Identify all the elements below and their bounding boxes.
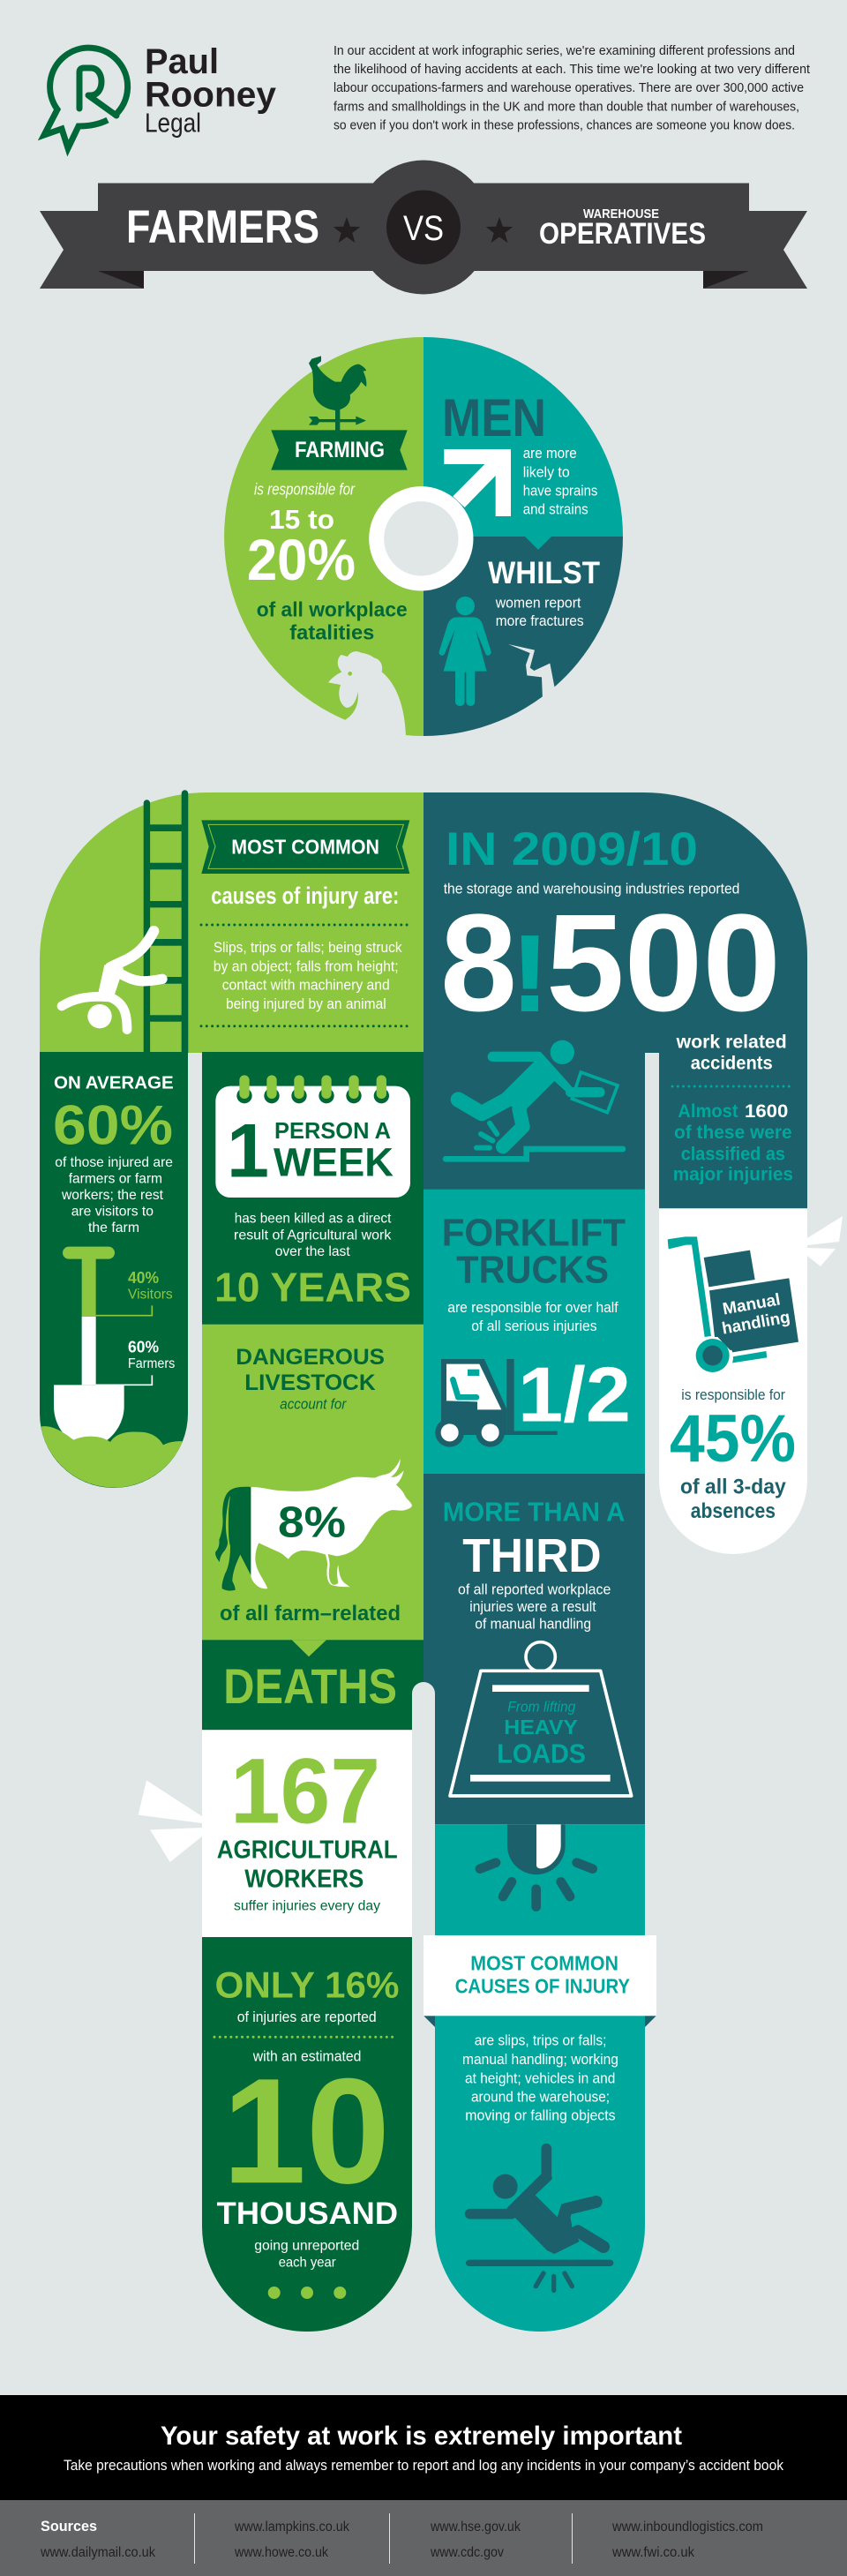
title banner [40, 161, 807, 295]
heading: in 2009/10: IN 2009/10 [446, 823, 698, 875]
text: major injuries: major injuries [673, 1165, 793, 1185]
heading: dangerous livestock: DANGEROUS [236, 1345, 385, 1370]
label: manual handling [721, 1290, 791, 1339]
text: farming fatalities: fatalities [289, 620, 374, 643]
icon: hen cut-out [324, 651, 417, 741]
icon: hand truck [668, 1236, 798, 1372]
text: major injuries: of these were [674, 1123, 792, 1143]
heading: more than a third: MORE THAN A [443, 1496, 625, 1527]
text: those injured: workers; the rest [61, 1188, 164, 1203]
stat: 8,500 [440, 886, 781, 1040]
panel: left arm, on average [40, 1052, 188, 1488]
text: farm related: of all farm–related [220, 1602, 401, 1626]
text: causes list: are slips, trips or falls; [475, 2032, 606, 2049]
label: visitors: Visitors [128, 1288, 173, 1303]
text: responsible: is responsible for [681, 1387, 785, 1403]
text: forklift stat [447, 1299, 618, 1334]
stat: thousand: THOUSAND [217, 2197, 398, 2231]
stat: 167: 167 [230, 1740, 380, 1844]
text: work related accidents: work related [676, 1032, 787, 1052]
text: whilst [488, 556, 600, 629]
text: those injured: the farm [88, 1220, 139, 1235]
stat: 8,500: 8 [440, 886, 517, 1040]
logo wordmark: Rooney [145, 76, 277, 115]
panel background [0, 2395, 847, 2500]
stat: 1 person a week [227, 1108, 394, 1193]
panel background [659, 1208, 807, 1554]
label: manual handling: Manual [721, 1290, 782, 1319]
ribbon body [98, 161, 749, 295]
stat: 1 person a week: 1 [227, 1108, 269, 1193]
text: precautions: Take precautions when working and always remember to report and log any incidents in your company’s accident book [64, 2457, 783, 2474]
text: major injuries: classified as [681, 1144, 785, 1164]
text: heavy loads: HEAVY [504, 1716, 578, 1739]
panel: sources [0, 2500, 847, 2576]
heading: farmers: FARMERS [126, 201, 319, 253]
text: men: are more [523, 445, 577, 462]
heading: warehouse operatives: WAREHOUSE [583, 207, 659, 222]
panel background [202, 1937, 412, 2332]
panel: dangerous livestock [202, 1325, 424, 1641]
VS badge [386, 191, 461, 265]
text: source links: www.dailymail.co.uk [40, 2545, 155, 2560]
icon: falling person on floor [469, 2149, 611, 2290]
stat: 1/2: 1/2 [518, 1351, 631, 1438]
panel: only 16% reported [202, 1937, 412, 2332]
icon: falling person [62, 931, 162, 1030]
intro text: labour occupations-farmers and warehouse operatives. There are over 300,000 active [334, 81, 804, 95]
stat: 1 person a week: WEEK [274, 1140, 394, 1185]
text: causes list [462, 2032, 618, 2124]
chart: shovel 40/60 split [41, 1247, 183, 1488]
text: men: have sprains [523, 483, 597, 499]
text: causes list: manual handling; working [462, 2051, 618, 2068]
stat: 1 person a week: PERSON A [274, 1117, 391, 1144]
icon: impact spark right [807, 1216, 843, 1266]
panel: one person a week [202, 1052, 424, 1325]
icon: ladder [144, 790, 188, 1053]
heading: warehouse operatives: OPERATIVES [539, 217, 706, 251]
text: source links: www.lampkins.co.uk [234, 2520, 349, 2535]
icon: speech bubble R [44, 48, 128, 148]
text: major injuries: 1600 [745, 1101, 788, 1122]
panel background [202, 1052, 424, 1325]
panel: head circle [224, 337, 623, 741]
icon: pressing finger [480, 1824, 593, 1907]
text: work related accidents [676, 1032, 787, 1074]
text: source links: www.inboundlogistics.com [611, 2520, 763, 2535]
text: with an estimated: with an estimated [252, 2049, 361, 2065]
text: 3-day absences: absences [691, 1499, 776, 1523]
VS badge: VS [403, 209, 444, 248]
logo wordmark: Legal [145, 107, 201, 138]
banner: most common causes [424, 1935, 656, 2016]
panel: right arm, manual handling [659, 1208, 843, 1554]
text: farming fatalities: of all workplace [257, 597, 408, 620]
text: storage: the storage and warehousing industries reported [444, 882, 739, 897]
gap between the legs [412, 1682, 435, 1941]
text: causes list: being injured by an animal [226, 995, 386, 1012]
icon: calendar [215, 1075, 410, 1198]
panel background [435, 2016, 645, 2332]
text: causes list: around the warehouse; [471, 2089, 610, 2106]
subheading: causes of injury are: [211, 882, 399, 909]
panel background [424, 1824, 645, 1939]
panel background [202, 1730, 412, 1937]
icon: weathervane rooster [309, 356, 366, 431]
stat: 60%: 60% [53, 1095, 173, 1157]
text: 3-day absences [680, 1476, 786, 1523]
heading: forklift trucks: TRUCKS [456, 1248, 609, 1291]
text: those injured: of those injured are [55, 1155, 173, 1170]
icon: slipping person [446, 1040, 623, 1159]
text: whilst: WHILST [488, 556, 600, 590]
text: heavy loads [497, 1698, 586, 1769]
logo wordmark: Paul [145, 42, 219, 81]
panel background [202, 1325, 424, 1641]
icon: star left [334, 217, 360, 243]
stat: 8,500: 500 [546, 886, 781, 1040]
text: killed [234, 1212, 392, 1259]
text: workplace injuries: injuries were a result [469, 1598, 596, 1615]
heading: deaths: DEATHS [223, 1658, 397, 1714]
icon: heavy weight [450, 1642, 632, 1796]
banner: most common [201, 820, 409, 874]
text: suffer injuries: suffer injuries every day [234, 1898, 380, 1913]
text: those injured: farmers or farm [69, 1171, 162, 1186]
banner: most common causes: MOST COMMON [470, 1951, 618, 1974]
text: farming fatalities: 15 to [269, 504, 334, 535]
label: manual handling: handling [721, 1308, 791, 1339]
icon: forklift [435, 1359, 558, 1447]
panel: warehouse most common causes [424, 1935, 656, 2332]
text: injuries reported: of injuries are reported [237, 2009, 377, 2025]
stat: 10: 10 [222, 2047, 390, 2215]
ribbon folds [424, 2016, 656, 2027]
text: on average: ON AVERAGE [54, 1072, 174, 1093]
text: 3-day absences: of all 3-day [680, 1476, 786, 1499]
text: major injuries: Almost [678, 1101, 738, 1122]
text: men: MEN [442, 388, 546, 447]
text: source links: www.hse.gov.uk [430, 2520, 521, 2535]
stat: 45%: 45% [670, 1401, 796, 1476]
text: source links: www.howe.co.uk [234, 2545, 328, 2560]
text: causes list: contact with machinery and [222, 977, 390, 994]
text: source links [40, 2520, 763, 2560]
banner: farming [271, 430, 408, 470]
panel: teal pressing finger [424, 1824, 645, 1939]
text: heavy loads: From lifting [507, 1698, 576, 1715]
panel background [40, 1052, 188, 1488]
intro text [334, 44, 810, 132]
ribbon tails [40, 211, 807, 289]
icon: woman [439, 597, 491, 706]
text: forklift stat: are responsible for over half [447, 1299, 618, 1316]
text: causes list: Slips, trips or falls; being struck [214, 939, 402, 956]
stat: only 16%: ONLY 16% [215, 1964, 399, 2005]
label: visitors [128, 1269, 173, 1303]
panel: safety message [0, 2395, 847, 2500]
heading: forklift trucks: FORKLIFT [442, 1212, 626, 1255]
intro text: farms and smallholdings in the UK and more than double that number of warehouses, [334, 101, 799, 115]
icon: impact spark left [139, 1780, 202, 1862]
heading: sources: Sources [41, 2518, 97, 2535]
text: killed: has been killed as a direct [235, 1212, 392, 1227]
text: heavy loads: LOADS [497, 1738, 586, 1769]
text: account for: account for [280, 1396, 347, 1413]
icon: star right [486, 217, 513, 243]
icon: crack [508, 644, 573, 700]
text: causes list: at height; vehicles in and [465, 2069, 615, 2086]
heading: safety: Your safety at work is extremely important [161, 2422, 682, 2451]
intro text: In our accident at work infographic series, we're examining different professions and [334, 44, 795, 58]
icon: male symbol [377, 449, 511, 583]
panel: farmer shoulder, most common causes [40, 790, 424, 1053]
text: going unreported: going unreported [254, 2238, 359, 2253]
text: farming fatalities: 20% [247, 527, 356, 592]
heading: more than a third: THIRD [462, 1529, 602, 1582]
label: farmers: 60% [128, 1339, 159, 1356]
panel background [40, 792, 424, 1053]
text: causes list: by an object; falls from height; [214, 958, 399, 974]
text: whilst: women report [495, 594, 581, 611]
text: major injuries [673, 1101, 793, 1185]
icon: bull [215, 1459, 412, 1590]
panel background [424, 1474, 645, 1824]
heading: forklift trucks [442, 1212, 626, 1291]
intro text: so even if you don't work in these professions, chances are someone you know does. [334, 118, 795, 132]
stat: 10 years: 10 YEARS [214, 1264, 411, 1310]
label: farmers: Farmers [128, 1356, 176, 1371]
text: work related accidents: accidents [691, 1054, 773, 1074]
text: those injured [55, 1155, 173, 1235]
banner: most common causes: CAUSES OF INJURY [455, 1975, 630, 1998]
text: causes list: moving or falling objects [465, 2107, 616, 2124]
banner: farming: FARMING [295, 438, 385, 462]
text: workplace injuries [458, 1581, 611, 1633]
text: men [442, 388, 597, 518]
text: whilst: more fractures [496, 612, 584, 629]
banner: most common: MOST COMMON [231, 835, 379, 858]
text: going unreported [254, 2238, 359, 2270]
heading: dangerous livestock [236, 1345, 385, 1395]
panel background [424, 792, 807, 1209]
panel: warehouse shoulder, 8,500 [424, 792, 807, 1209]
head: green half [224, 337, 424, 736]
text: source links: www.cdc.gov [430, 2545, 504, 2560]
stat: 8%: 8% [278, 1499, 346, 1547]
label: visitors: 40% [128, 1269, 159, 1287]
panel: 167 agricultural workers [139, 1730, 412, 1937]
pointer [525, 537, 551, 550]
text: causes list [214, 939, 402, 1012]
heading: dangerous livestock: LIVESTOCK [244, 1371, 376, 1395]
logo: Paul Rooney Legal [44, 42, 277, 148]
heading: agricultural workers: AGRICULTURAL [217, 1836, 398, 1865]
panel: deaths [202, 1640, 424, 1730]
text: source links: www.fwi.co.uk [611, 2545, 694, 2560]
head: dark teal quadrant [424, 537, 623, 736]
text: men: and strains [523, 501, 588, 518]
panel: more than a third [424, 1474, 645, 1824]
text: forklift stat: of all serious injuries [471, 1318, 597, 1334]
text: killed: result of Agricultural work [234, 1228, 392, 1243]
head: teal quadrant [424, 337, 623, 537]
heading: agricultural workers: WORKERS [244, 1866, 364, 1894]
text: workplace injuries: of manual handling [475, 1616, 591, 1633]
panel background [0, 2500, 847, 2576]
text: killed: over the last [275, 1244, 350, 1259]
heading: agricultural workers [217, 1836, 398, 1894]
heading: more than a third [443, 1496, 625, 1582]
decorative dots [268, 2287, 346, 2299]
text: those injured: are visitors to [71, 1205, 154, 1220]
pointer [292, 1640, 326, 1656]
panel background [424, 1190, 645, 1474]
text: men: likely to [523, 463, 570, 480]
intro text: the likelihood of having accidents at each. This time we're looking at two very different [334, 63, 810, 77]
label: farmers [128, 1339, 176, 1371]
text: workplace injuries: of all reported workplace [458, 1581, 611, 1598]
text: farming fatalities [247, 481, 408, 643]
text: going unreported: each year [279, 2255, 336, 2270]
text: farming fatalities: is responsible for [254, 481, 356, 499]
logo wordmark [145, 42, 277, 138]
panel background [202, 1640, 424, 1730]
panel: forklift trucks [424, 1190, 645, 1474]
heading: warehouse operatives [539, 207, 706, 251]
stat: 8,500: ! [512, 913, 548, 1033]
